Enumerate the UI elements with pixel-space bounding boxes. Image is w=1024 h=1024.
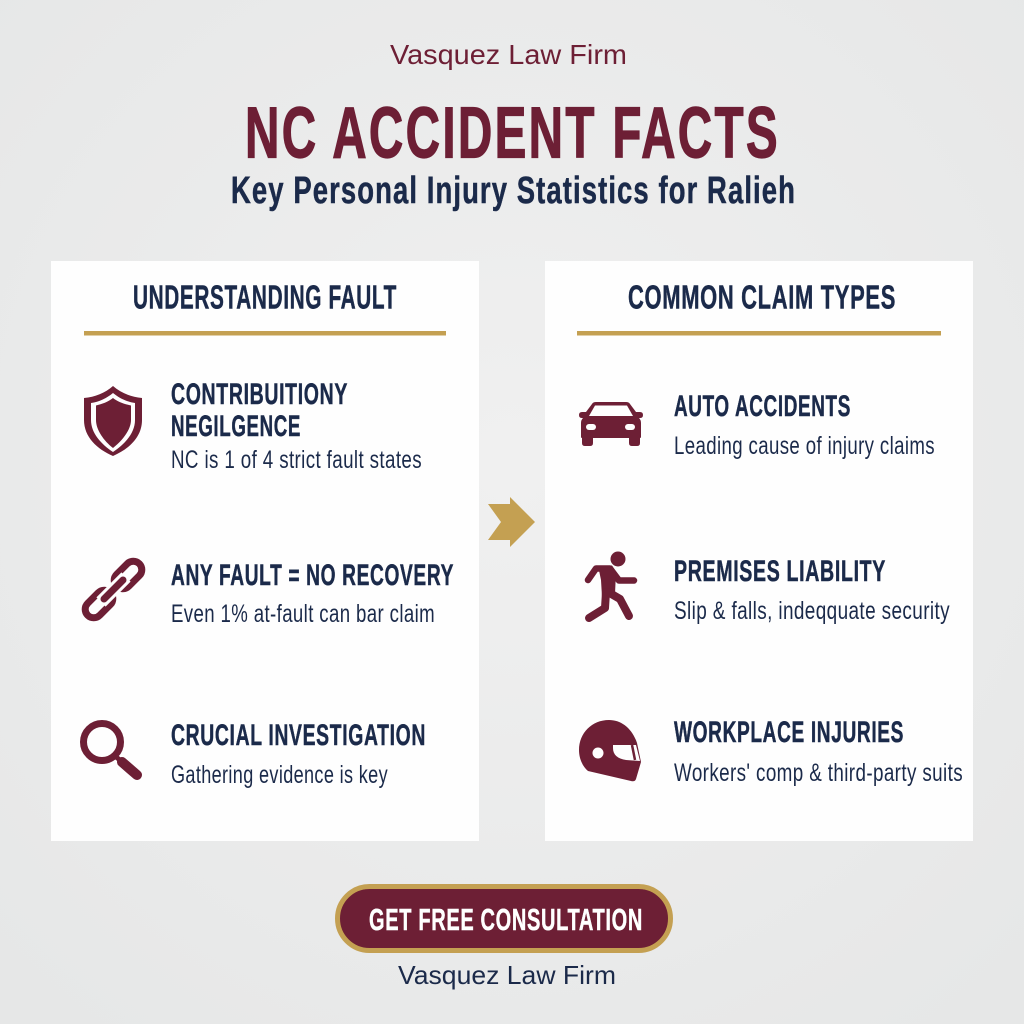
icon: helmet — [579, 720, 641, 781]
item: premises liability — [674, 555, 950, 625]
panel: common claim types — [545, 261, 973, 841]
firm name top: Vasquez Law Firm — [390, 39, 627, 70]
item: contributory negligence — [171, 378, 422, 474]
item: any fault: ANY FAULT = NO RECOVERY — [171, 559, 454, 592]
arrow — [488, 497, 535, 547]
item: crucial investigation: Gathering evidence is key — [171, 761, 388, 789]
call to action button: GET FREE CONSULTATION — [369, 902, 643, 937]
item: contributory negligence: NEGILGENCE — [171, 410, 301, 443]
item: any fault — [171, 559, 454, 628]
icon: chain link — [82, 558, 145, 621]
item: any fault: Even 1% at-fault can bar claim — [171, 600, 435, 628]
icon: car — [579, 402, 643, 446]
item: auto accidents — [674, 390, 935, 460]
icon: running person — [588, 552, 634, 618]
heading: understanding fault: UNDERSTANDING FAULT — [133, 278, 397, 316]
item: premises liability: PREMISES LIABILITY — [674, 555, 886, 588]
item: auto accidents: AUTO ACCIDENTS — [674, 390, 851, 423]
item: contributory negligence: NC is 1 of 4 strict fault states — [171, 446, 422, 474]
icon: shield — [84, 386, 142, 456]
heading: common claim types: COMMON CLAIM TYPES — [628, 278, 896, 316]
item: crucial investigation: CRUCIAL INVESTIGATION — [171, 719, 426, 752]
firm name bottom: Vasquez Law Firm — [398, 960, 616, 990]
panel: understanding fault — [51, 261, 479, 841]
item: workplace injuries — [674, 716, 963, 787]
item: contributory negligence: CONTRIBUITIONY — [171, 378, 348, 411]
call to action button — [338, 886, 670, 950]
item: auto accidents: Leading cause of injury claims — [674, 432, 935, 460]
icon: magnifier — [84, 724, 137, 775]
item: crucial investigation — [171, 719, 426, 789]
subtitle: Key Personal Injury Statistics for Ralieh — [231, 170, 796, 212]
